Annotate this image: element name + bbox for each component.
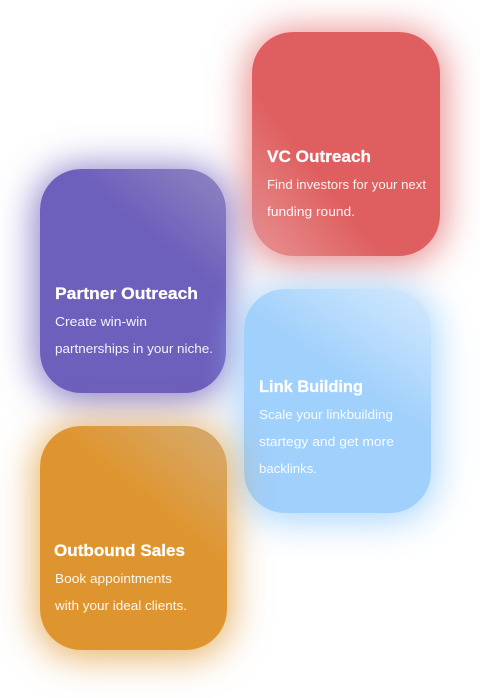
text: Outbound Sales description: with your ideal clients. [54, 599, 187, 613]
text: VC Outreach description: Find investors for your next [267, 178, 427, 192]
heading: VC Outreach: VC Outreach [267, 147, 371, 166]
panel: Partner Outreach [40, 169, 226, 393]
panel: Link Building [244, 289, 431, 513]
text: Outbound Sales description [54, 572, 187, 613]
text: Partner Outreach description [55, 315, 213, 356]
heading: Outbound Sales: Outbound Sales [54, 541, 185, 560]
panel: Outbound Sales [40, 426, 227, 650]
text: Link Building description: startegy and get more [259, 435, 394, 449]
text: VC Outreach description: funding round. [267, 205, 355, 219]
text: VC Outreach description [267, 178, 427, 219]
text: Link Building description: backlinks. [259, 462, 317, 476]
text: Partner Outreach description: partnerships in your niche. [55, 342, 213, 356]
panel: VC Outreach [252, 32, 440, 256]
text: Partner Outreach description: Create win-win [55, 315, 147, 329]
heading: Partner Outreach: Partner Outreach [55, 284, 198, 303]
text: Link Building description: Scale your linkbuilding [259, 408, 393, 422]
heading: Link Building: Link Building [259, 377, 363, 396]
text: Link Building description [259, 408, 394, 476]
text: Outbound Sales description: Book appointments [55, 572, 172, 586]
